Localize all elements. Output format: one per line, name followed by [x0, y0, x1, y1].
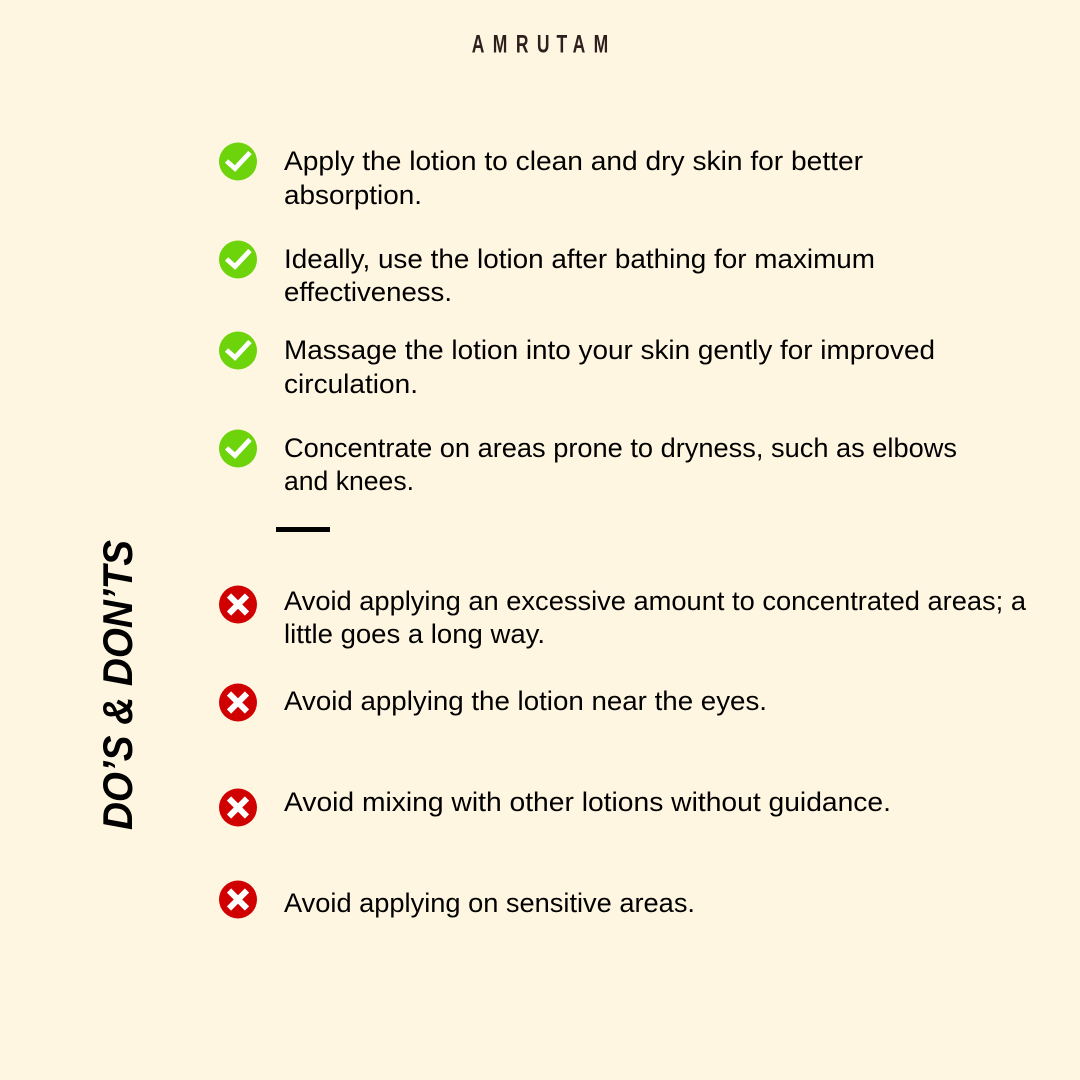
do item 3	[219, 332, 935, 399]
text: don't 4: Avoid applying on sensitive areas.	[284, 888, 695, 918]
text: do 2	[284, 244, 875, 307]
don't item 4	[219, 880, 695, 918]
do item 2	[219, 240, 875, 307]
icon: green check	[219, 430, 257, 468]
do item 4	[219, 430, 957, 496]
separator dash	[276, 527, 330, 532]
text: don't 3: Avoid mixing with other lotions without guidance.	[284, 787, 891, 817]
text: do 1: Apply the lotion to clean and dry skin for better	[284, 146, 863, 176]
don't item 3	[219, 787, 891, 826]
text: do 2: Ideally, use the lotion after bathing for maximum	[284, 244, 875, 274]
text: do 3	[284, 335, 935, 399]
icon: green check	[219, 240, 257, 278]
don't item 1	[219, 586, 1027, 649]
text: do 2: effectiveness.	[284, 277, 452, 307]
text: do 1: absorption.	[284, 180, 422, 210]
icon: green check	[219, 332, 257, 370]
icon: red cross	[219, 880, 257, 918]
text: don't 1	[284, 586, 1027, 649]
do item 1	[219, 142, 863, 210]
icon: red cross	[219, 788, 257, 826]
text: do 1	[284, 146, 863, 210]
brand name: AMRUTAM	[472, 29, 608, 58]
icon: red cross	[219, 586, 257, 624]
text: do 4: Concentrate on areas prone to dryness, such as elbows	[284, 433, 957, 463]
icon: red cross	[219, 684, 257, 722]
text: do 4	[284, 433, 957, 496]
text: don't 1: Avoid applying an excessive amount to concentrated areas; a	[284, 586, 1027, 616]
text: don't 2: Avoid applying the lotion near the eyes.	[284, 686, 767, 716]
title: do's and don'ts: DO’S & DON’TS	[94, 540, 141, 830]
text: do 3: circulation.	[284, 369, 418, 399]
don't item 2	[219, 684, 767, 722]
icon: green check	[219, 142, 257, 180]
text: don't 1: little goes a long way.	[284, 619, 545, 649]
text: do 4: and knees.	[284, 466, 414, 496]
text: do 3: Massage the lotion into your skin gently for improved	[284, 335, 935, 365]
